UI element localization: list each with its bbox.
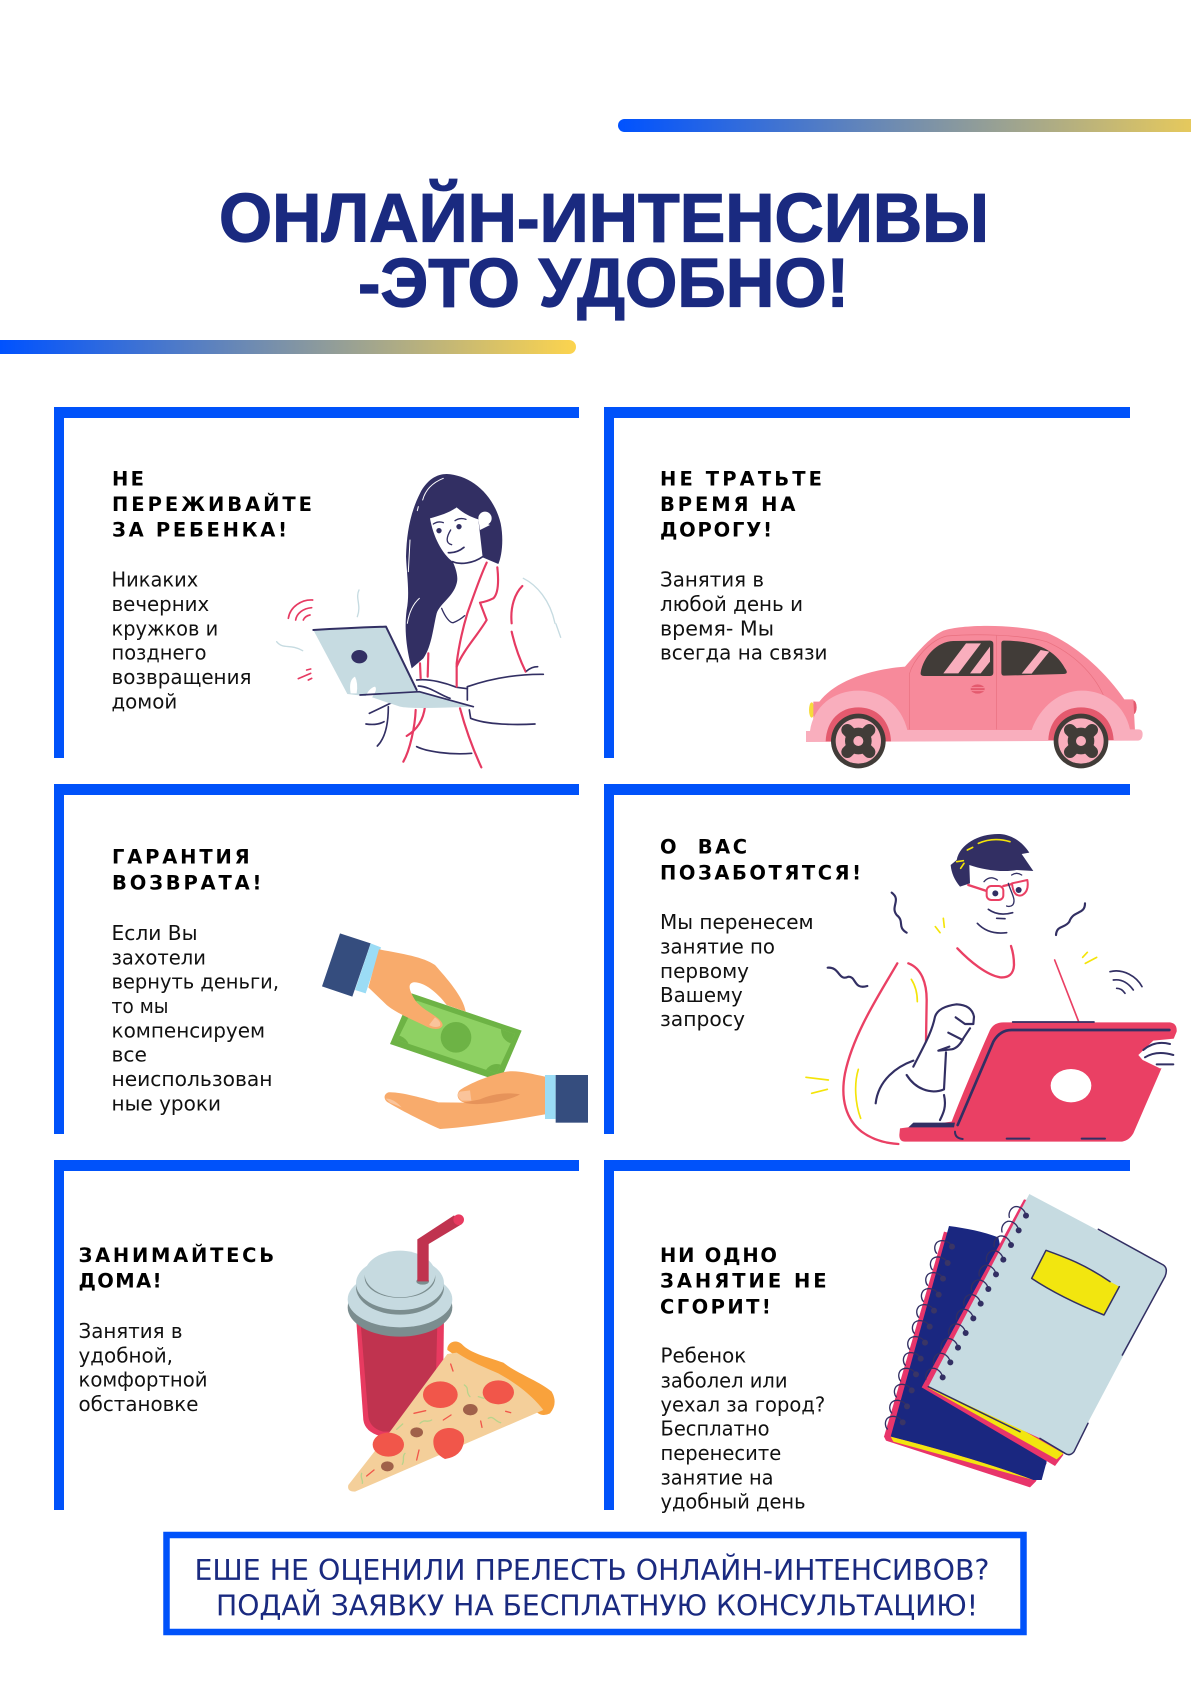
panel: study at home bbox=[54, 1160, 579, 1510]
heading: guarantee bbox=[112, 846, 261, 894]
heading: study at home: ЗАНИМАЙТЕСЬ bbox=[78, 1244, 274, 1267]
heading: do not waste time bbox=[660, 468, 822, 542]
panel: money-back guarantee bbox=[54, 784, 588, 1134]
panel: no lesson is lost bbox=[604, 1160, 1166, 1513]
icon: spiral notebooks bbox=[884, 1194, 1166, 1487]
text: comfortable setting: комфортной bbox=[78, 1368, 208, 1392]
icon: hands passing money bbox=[322, 933, 588, 1129]
text: classes any day bbox=[660, 568, 828, 665]
text: reschedule for free: уехал за город? bbox=[660, 1392, 825, 1416]
heading: taken care of: ПОЗАБОТЯТСЯ! bbox=[660, 862, 861, 884]
text: comfortable setting: Занятия в bbox=[78, 1319, 182, 1343]
heading: do not waste time: ВРЕМЯ НА bbox=[660, 493, 796, 516]
text: refund terms: захотели bbox=[112, 945, 206, 969]
icon: woman with laptop bbox=[277, 474, 561, 767]
heading: no lesson is lost: ЗАНЯТИЕ НЕ bbox=[660, 1270, 827, 1292]
text: reschedule on request: Мы перенесем bbox=[660, 910, 814, 934]
text: comfortable setting: удобной, bbox=[78, 1343, 173, 1367]
heading: do not worry: НЕ bbox=[112, 468, 144, 490]
text: comfortable setting bbox=[78, 1319, 208, 1416]
text: reschedule for free: заболел или bbox=[660, 1368, 788, 1392]
callout text: ПОДАЙ ЗАЯВКУ НА БЕСПЛАТНУЮ КОНСУЛЬТАЦИЮ! bbox=[216, 1588, 978, 1622]
heading: do not worry bbox=[112, 468, 312, 542]
panel: do not worry about the child bbox=[54, 407, 579, 767]
decorative bar: bottom gradient bbox=[0, 340, 576, 354]
heading: no lesson is lost bbox=[660, 1244, 827, 1318]
title bbox=[219, 178, 989, 322]
text: reschedule on request: занятие по bbox=[660, 934, 775, 958]
text: reschedule on request: первому bbox=[660, 959, 749, 983]
decorative bar: top gradient bbox=[618, 119, 1191, 132]
text: classes any day: Занятия в bbox=[660, 568, 764, 592]
text: reschedule for free: перенесите bbox=[660, 1441, 781, 1465]
heading: taken care of: О ВАС bbox=[660, 836, 747, 858]
heading: do not waste time: НЕ ТРАТЬТЕ bbox=[660, 468, 822, 490]
text: refund terms: ные уроки bbox=[112, 1091, 221, 1115]
heading: study at home: ДОМА! bbox=[78, 1270, 162, 1292]
panel: do not waste time on the road bbox=[604, 407, 1143, 768]
text: reschedule for free: Ребенок bbox=[660, 1344, 746, 1368]
text: refund terms: неиспользован bbox=[112, 1067, 272, 1091]
title: ОНЛАЙН-ИНТЕНСИВЫ bbox=[219, 178, 989, 256]
text: no evening clubs bbox=[112, 568, 252, 713]
heading: taken care of bbox=[660, 836, 861, 884]
text: reschedule on request: Вашему bbox=[660, 983, 743, 1007]
callout text bbox=[194, 1553, 990, 1622]
text: refund terms: компенсируем bbox=[112, 1018, 265, 1042]
text: refund terms bbox=[112, 921, 279, 1115]
text: no evening clubs: домой bbox=[112, 689, 177, 713]
heading: no lesson is lost: СГОРИТ! bbox=[660, 1296, 771, 1318]
text: reschedule for free: Бесплатно bbox=[660, 1417, 770, 1441]
icon: pink car bbox=[806, 626, 1143, 768]
callout: consultation request bbox=[166, 1535, 1024, 1632]
heading: do not worry: ЗА РЕБЕНКА! bbox=[112, 518, 287, 542]
panel: you will be taken care of bbox=[604, 784, 1177, 1144]
text: refund terms: Если Вы bbox=[112, 921, 198, 945]
text: reschedule for free: удобный день bbox=[660, 1489, 806, 1513]
text: classes any day: любой день и bbox=[660, 592, 803, 616]
text: reschedule for free bbox=[660, 1344, 825, 1513]
text: refund terms: вернуть деньги, bbox=[112, 970, 279, 994]
text: reschedule for free: занятие на bbox=[660, 1465, 774, 1489]
text: refund terms: то мы bbox=[112, 994, 168, 1018]
text: no evening clubs: Никаких bbox=[112, 568, 198, 592]
heading: guarantee: ГАРАНТИЯ bbox=[112, 846, 250, 868]
text: reschedule on request bbox=[660, 910, 814, 1031]
heading: guarantee: ВОЗВРАТА! bbox=[112, 872, 261, 894]
callout text: ЕШЕ НЕ ОЦЕНИЛИ ПРЕЛЕСТЬ ОНЛАЙН-ИНТЕНСИВОВ? bbox=[194, 1553, 990, 1587]
heading: do not worry: ПЕРЕЖИВАЙТЕ bbox=[112, 493, 312, 516]
heading: do not waste time: ДОРОГУ! bbox=[660, 518, 772, 542]
heading: study at home bbox=[78, 1244, 274, 1292]
text: classes any day: всегда на связи bbox=[660, 641, 828, 665]
text: classes any day: время- Мы bbox=[660, 616, 774, 640]
text: comfortable setting: обстановке bbox=[78, 1392, 198, 1416]
icon: drink and pizza bbox=[348, 1214, 555, 1492]
text: no evening clubs: позднего bbox=[112, 641, 206, 665]
title: -ЭТО УДОБНО! bbox=[358, 244, 849, 322]
text: reschedule on request: запросу bbox=[660, 1007, 745, 1031]
text: refund terms: все bbox=[112, 1043, 147, 1067]
text: no evening clubs: возвращения bbox=[112, 665, 252, 689]
heading: no lesson is lost: НИ ОДНО bbox=[660, 1244, 777, 1267]
text: no evening clubs: вечерних bbox=[112, 592, 209, 616]
icon: man at red laptop bbox=[806, 834, 1177, 1144]
text: no evening clubs: кружков и bbox=[112, 616, 218, 640]
